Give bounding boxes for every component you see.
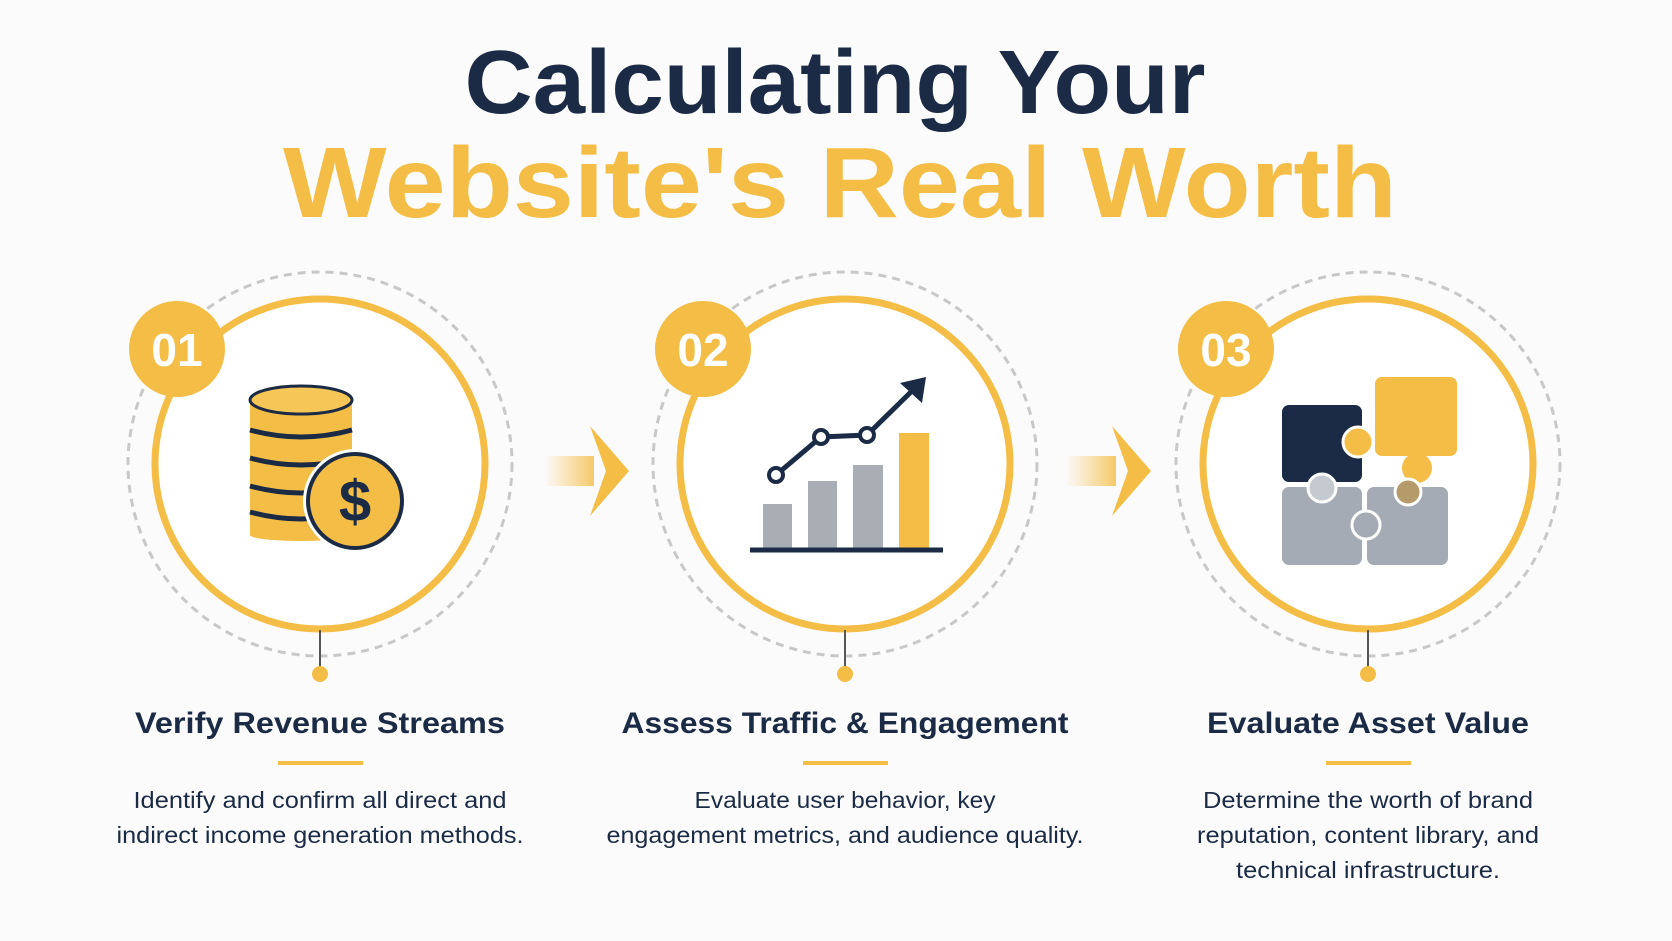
badge 01 [129,301,225,397]
description 1: Identify and confirm all direct and [134,787,506,813]
heading 1: Verify Revenue Streams [135,707,505,740]
step 3 [1176,272,1560,883]
icon: coins: $ [339,469,371,534]
description 3: technical infrastructure. [1236,857,1500,883]
badge 02: 02 [677,324,729,376]
heading 2: Assess Traffic & Engagement [622,707,1068,740]
icon: chart [750,377,943,550]
description 1: indirect income generation methods. [116,822,524,848]
description 2: Evaluate user behavior, key [694,787,996,813]
step 1 [116,272,524,848]
step 2 [606,272,1084,848]
badge 03: 03 [1200,324,1252,376]
icon: puzzle [1282,377,1457,565]
description 3: reputation, content library, and [1197,822,1539,848]
heading 3: Evaluate Asset Value [1207,707,1529,740]
badge 02 [655,301,751,397]
description 3: Determine the worth of brand [1203,787,1533,813]
title: Calculating Your [464,33,1206,133]
description 2: engagement metrics, and audience quality. [606,822,1084,848]
title [283,33,1397,239]
badge 01: 01 [151,324,203,376]
badge 03 [1178,301,1274,397]
arrow 2 [1066,426,1151,516]
arrow 1 [544,426,629,516]
title: Website's Real Worth [283,127,1397,239]
icon: coins [250,386,407,553]
